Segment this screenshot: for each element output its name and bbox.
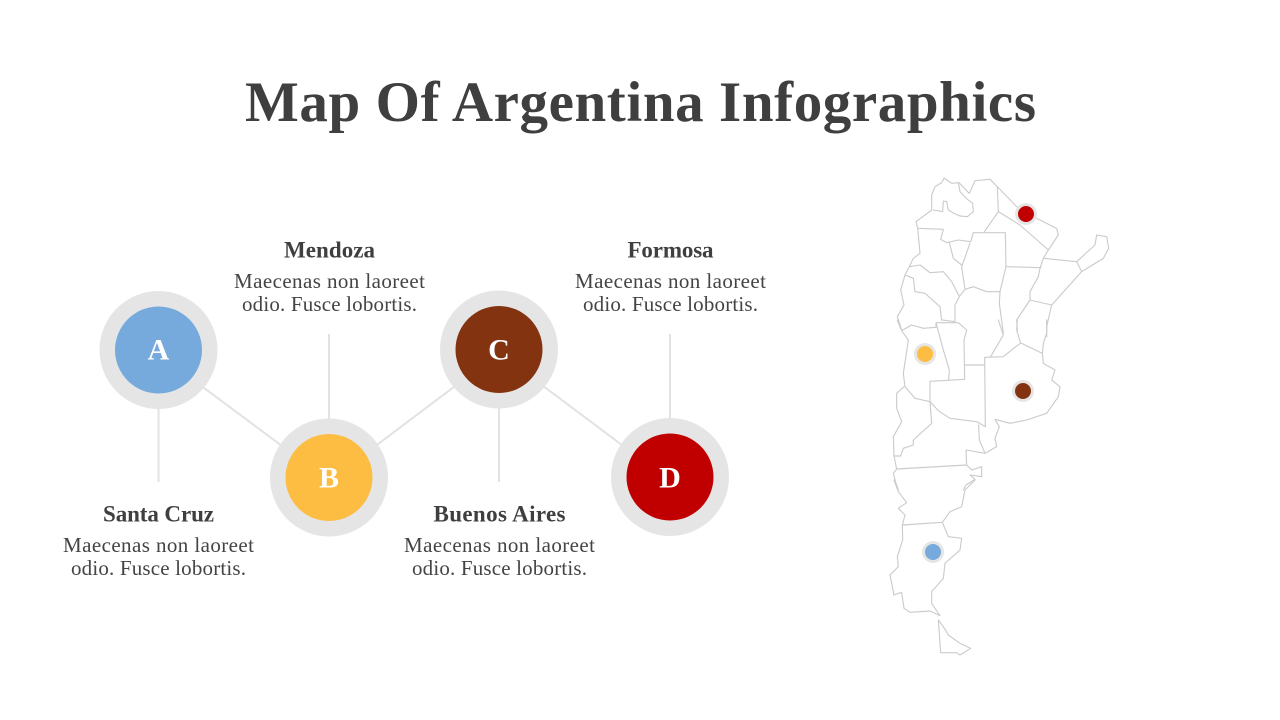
node A: A — [148, 334, 170, 366]
map pin: Santa Cruz — [922, 541, 944, 563]
node B: B — [319, 462, 339, 494]
map pin: Mendoza — [914, 343, 936, 365]
node B — [270, 418, 388, 536]
map pin: Formosa — [1015, 203, 1037, 225]
node C — [440, 290, 558, 408]
text block: Formosa: Maecenas non laoreet — [575, 269, 766, 293]
text block: Formosa: odio. Fusce lobortis. — [583, 292, 758, 316]
text block: Buenos Aires: odio. Fusce lobortis. — [412, 556, 587, 580]
text block: Formosa — [575, 238, 766, 316]
text block: Santa Cruz: odio. Fusce lobortis. — [71, 556, 246, 580]
text block: Mendoza: Maecenas non laoreet — [234, 269, 425, 293]
text block: Santa Cruz: Maecenas non laoreet — [63, 533, 254, 557]
text block: Mendoza: odio. Fusce lobortis. — [242, 292, 417, 316]
title: Map Of Argentina Infographics — [245, 71, 1036, 134]
text block: Buenos Aires: Buenos Aires — [434, 502, 566, 526]
text block: Buenos Aires — [404, 502, 595, 580]
text block: Mendoza — [234, 238, 425, 316]
text block: Formosa: Formosa — [628, 238, 714, 262]
node A — [100, 291, 218, 409]
node D — [611, 418, 729, 536]
text block: Buenos Aires: Maecenas non laoreet — [404, 533, 595, 557]
text block: Mendoza: Mendoza — [284, 238, 376, 262]
map pin: Buenos Aires — [1012, 380, 1034, 402]
text block: Santa Cruz — [63, 502, 254, 580]
connector lines — [158, 334, 670, 482]
node C: C — [488, 334, 510, 366]
node D: D — [659, 462, 681, 494]
map of Argentina — [890, 178, 1109, 655]
text block: Santa Cruz: Santa Cruz — [103, 502, 214, 526]
